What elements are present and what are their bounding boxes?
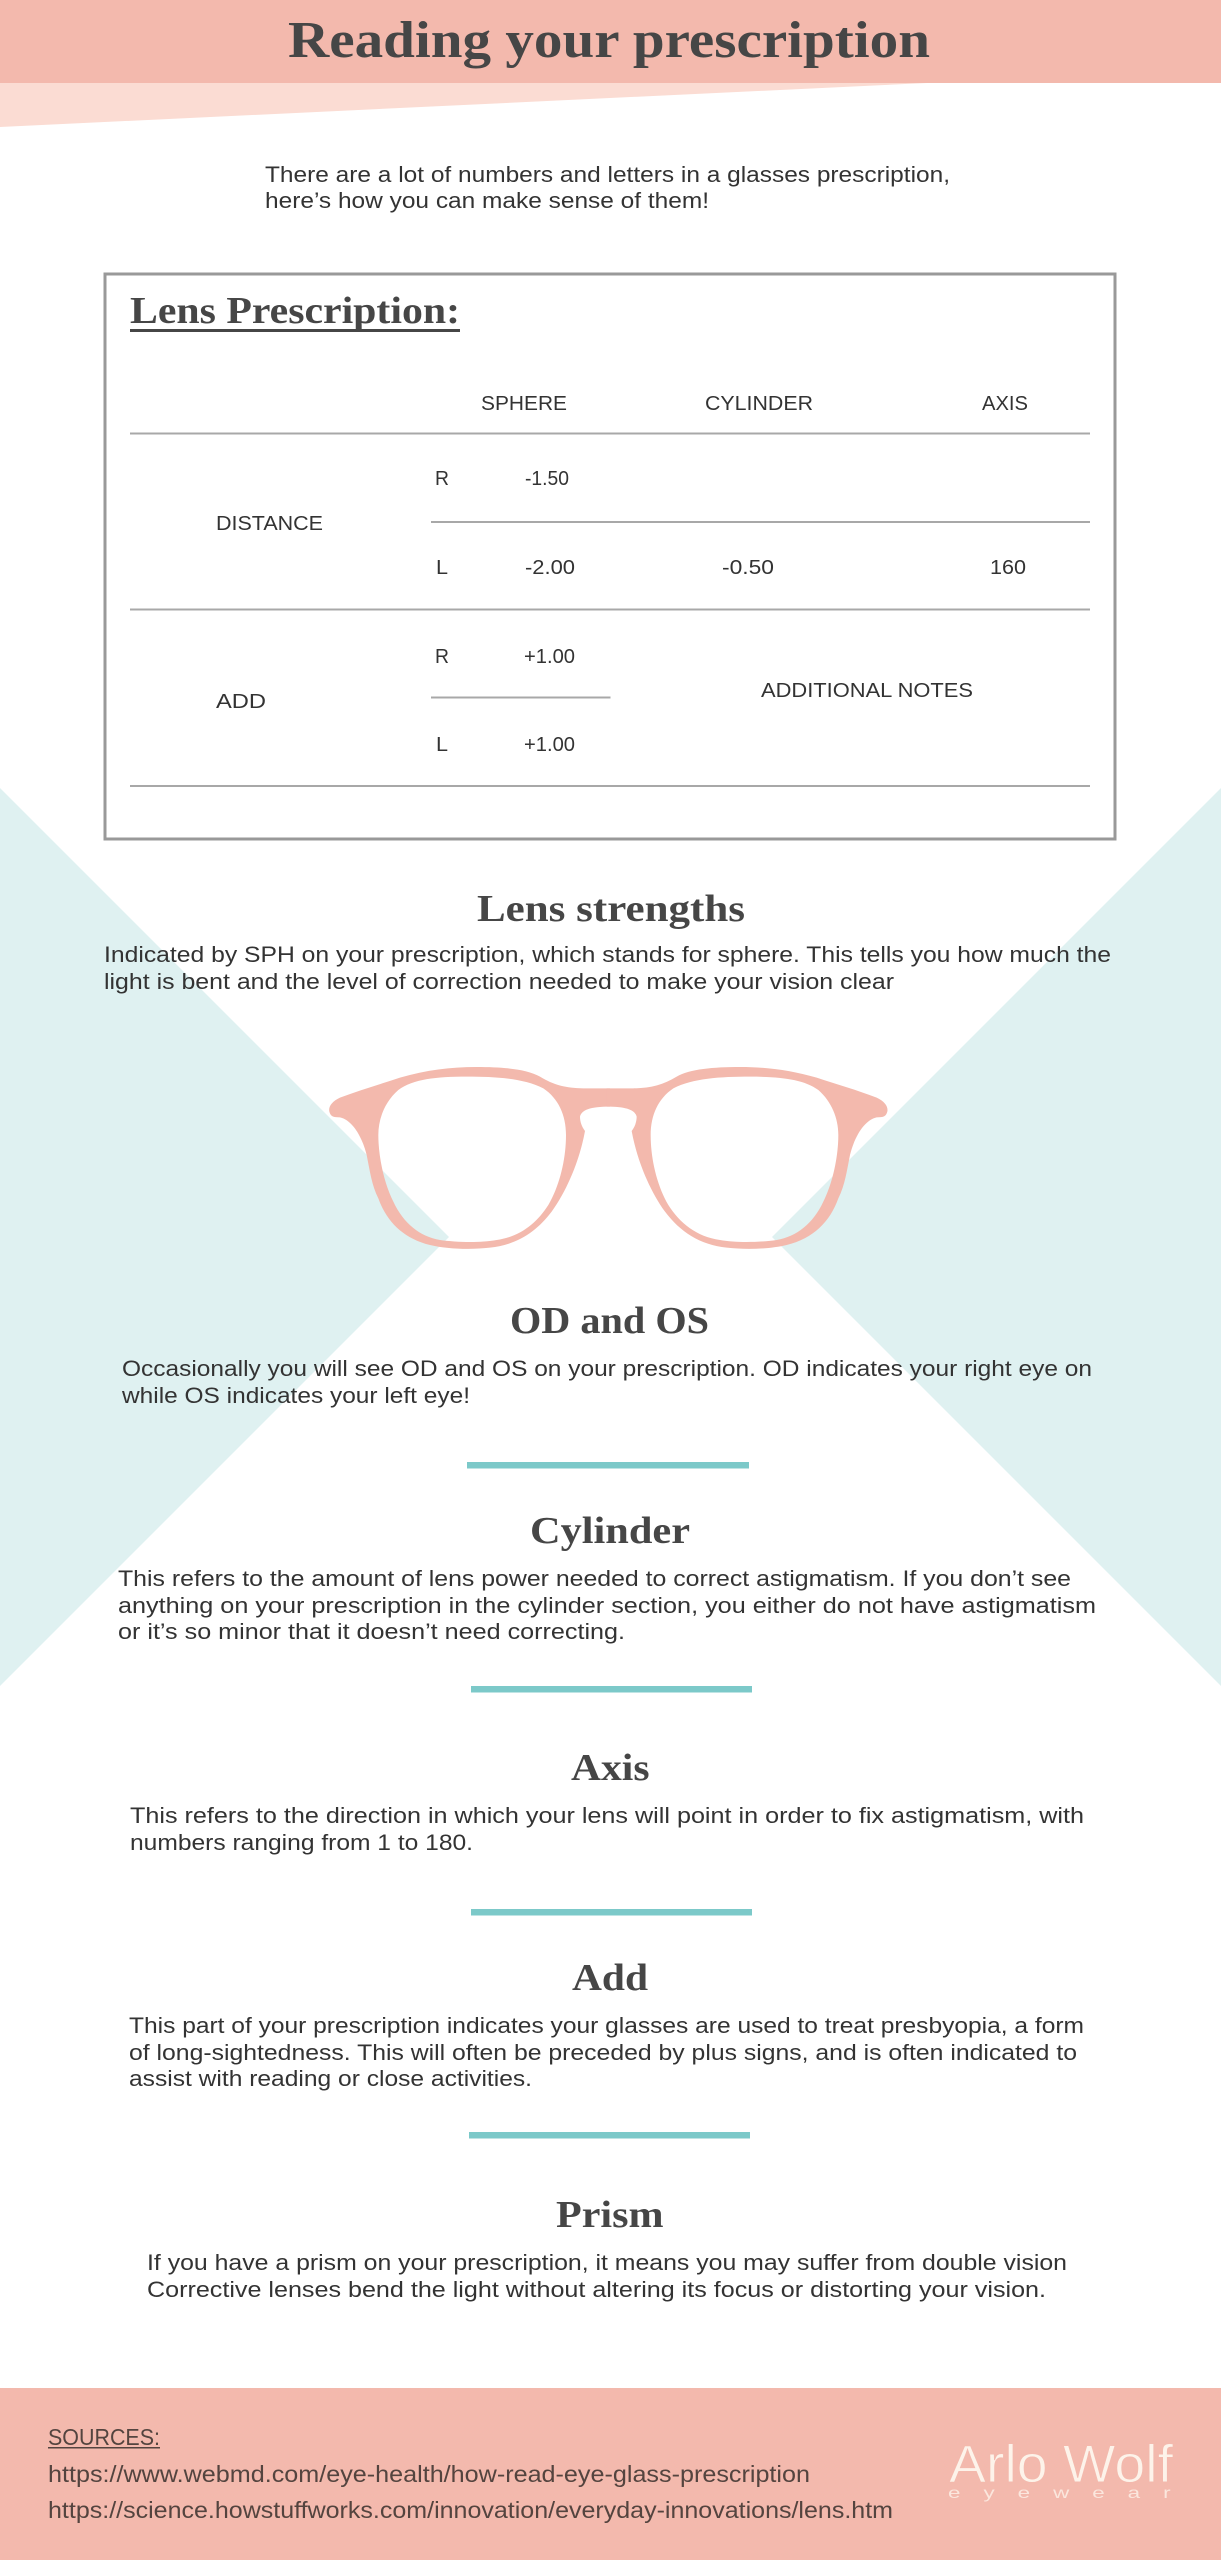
sources: https://science.howstuffworks.com/innovation/everyday-innovations/lens.htm bbox=[48, 2497, 893, 2523]
section: add: This part of your prescription indicates your glasses are used to treat presbyopia, a form bbox=[129, 2013, 1084, 2038]
add row: L bbox=[436, 734, 448, 756]
section: cylinder: or it’s so minor that it doesn’t need correcting. bbox=[118, 1619, 625, 1644]
panel: lens prescription table bbox=[105, 274, 1115, 839]
distance row: DISTANCE bbox=[216, 513, 323, 535]
add row: +1.00 bbox=[524, 734, 575, 756]
section: add: Add bbox=[572, 1957, 648, 1999]
distance row bbox=[216, 468, 1026, 579]
section: add bbox=[129, 1957, 1084, 2091]
add row bbox=[216, 646, 973, 756]
header band bbox=[0, 0, 1221, 127]
logo: Arlo Wolf eyewear: eyewear bbox=[948, 2484, 1171, 2502]
section: axis: Axis bbox=[571, 1747, 650, 1789]
sources bbox=[48, 2424, 893, 2523]
add row: R bbox=[435, 646, 449, 668]
section: prism: If you have a prism on your prescription, it means you may suffer from double vision bbox=[147, 2250, 1067, 2275]
distance row: L bbox=[436, 557, 448, 579]
section: OD and OS: OD and OS bbox=[510, 1300, 709, 1342]
section: lens strengths: Indicated by SPH on your prescription, which stands for sphere. This tells you how much the bbox=[104, 942, 1111, 967]
intro text: here’s how you can make sense of them! bbox=[265, 188, 709, 213]
sources: SOURCES: bbox=[48, 2424, 160, 2450]
intro text bbox=[265, 162, 950, 213]
section: axis: This refers to the direction in which your lens will point in order to fix astigmatism, with bbox=[130, 1803, 1084, 1828]
table column headers: CYLINDER bbox=[705, 393, 813, 415]
section: cylinder: This refers to the amount of lens power needed to correct astigmatism. If you don’t see bbox=[118, 1566, 1071, 1591]
logo: Arlo Wolf eyewear: Arlo Wolf bbox=[949, 2435, 1173, 2494]
add row: +1.00 bbox=[524, 646, 575, 668]
distance row: R bbox=[435, 468, 449, 490]
background: teal triangles bbox=[0, 788, 1221, 1686]
section: OD and OS: Occasionally you will see OD and OS on your prescription. OD indicates your right eye on bbox=[122, 1356, 1092, 1381]
distance row: -2.00 bbox=[525, 557, 575, 579]
section: lens strengths: Lens strengths bbox=[477, 888, 745, 930]
add row: ADD bbox=[216, 691, 266, 713]
section: OD and OS bbox=[121, 1300, 1092, 1408]
section: OD and OS: while OS indicates your left eye! bbox=[121, 1383, 470, 1408]
section: prism bbox=[147, 2194, 1067, 2302]
table column headers: AXIS bbox=[982, 393, 1028, 415]
title: Reading your prescription bbox=[288, 12, 930, 69]
distance row: 160 bbox=[990, 557, 1026, 579]
distance row: -1.50 bbox=[525, 468, 569, 490]
table column headers bbox=[481, 393, 1028, 415]
section: prism: Prism bbox=[556, 2194, 664, 2236]
add row: ADDITIONAL NOTES bbox=[761, 680, 973, 702]
footer band bbox=[0, 2388, 1221, 2560]
table column headers: SPHERE bbox=[481, 393, 567, 415]
section: cylinder: anything on your prescription in the cylinder section, you either do not have astigmatism bbox=[118, 1593, 1096, 1618]
sources: https://www.webmd.com/eye-health/how-read-eye-glass-prescription bbox=[48, 2461, 810, 2487]
panel heading: Lens Prescription: bbox=[130, 290, 460, 332]
intro text: There are a lot of numbers and letters in a glasses prescription, bbox=[265, 162, 950, 187]
section: lens strengths bbox=[104, 888, 1111, 994]
section: cylinder bbox=[118, 1510, 1096, 1644]
section: lens strengths: light is bent and the level of correction needed to make your vision clear bbox=[104, 969, 894, 994]
section: add: of long-sightedness. This will often be preceded by plus signs, and is often indicated to bbox=[129, 2040, 1077, 2065]
icon: glasses bbox=[329, 1067, 887, 1249]
section: prism: Corrective lenses bend the light without altering its focus or distorting your vision. bbox=[147, 2277, 1046, 2302]
section: axis: numbers ranging from 1 to 180. bbox=[130, 1830, 473, 1855]
section: axis bbox=[130, 1747, 1084, 1855]
distance row: -0.50 bbox=[722, 557, 774, 579]
section: add: assist with reading or close activities. bbox=[129, 2066, 532, 2091]
section: cylinder: Cylinder bbox=[530, 1510, 690, 1552]
